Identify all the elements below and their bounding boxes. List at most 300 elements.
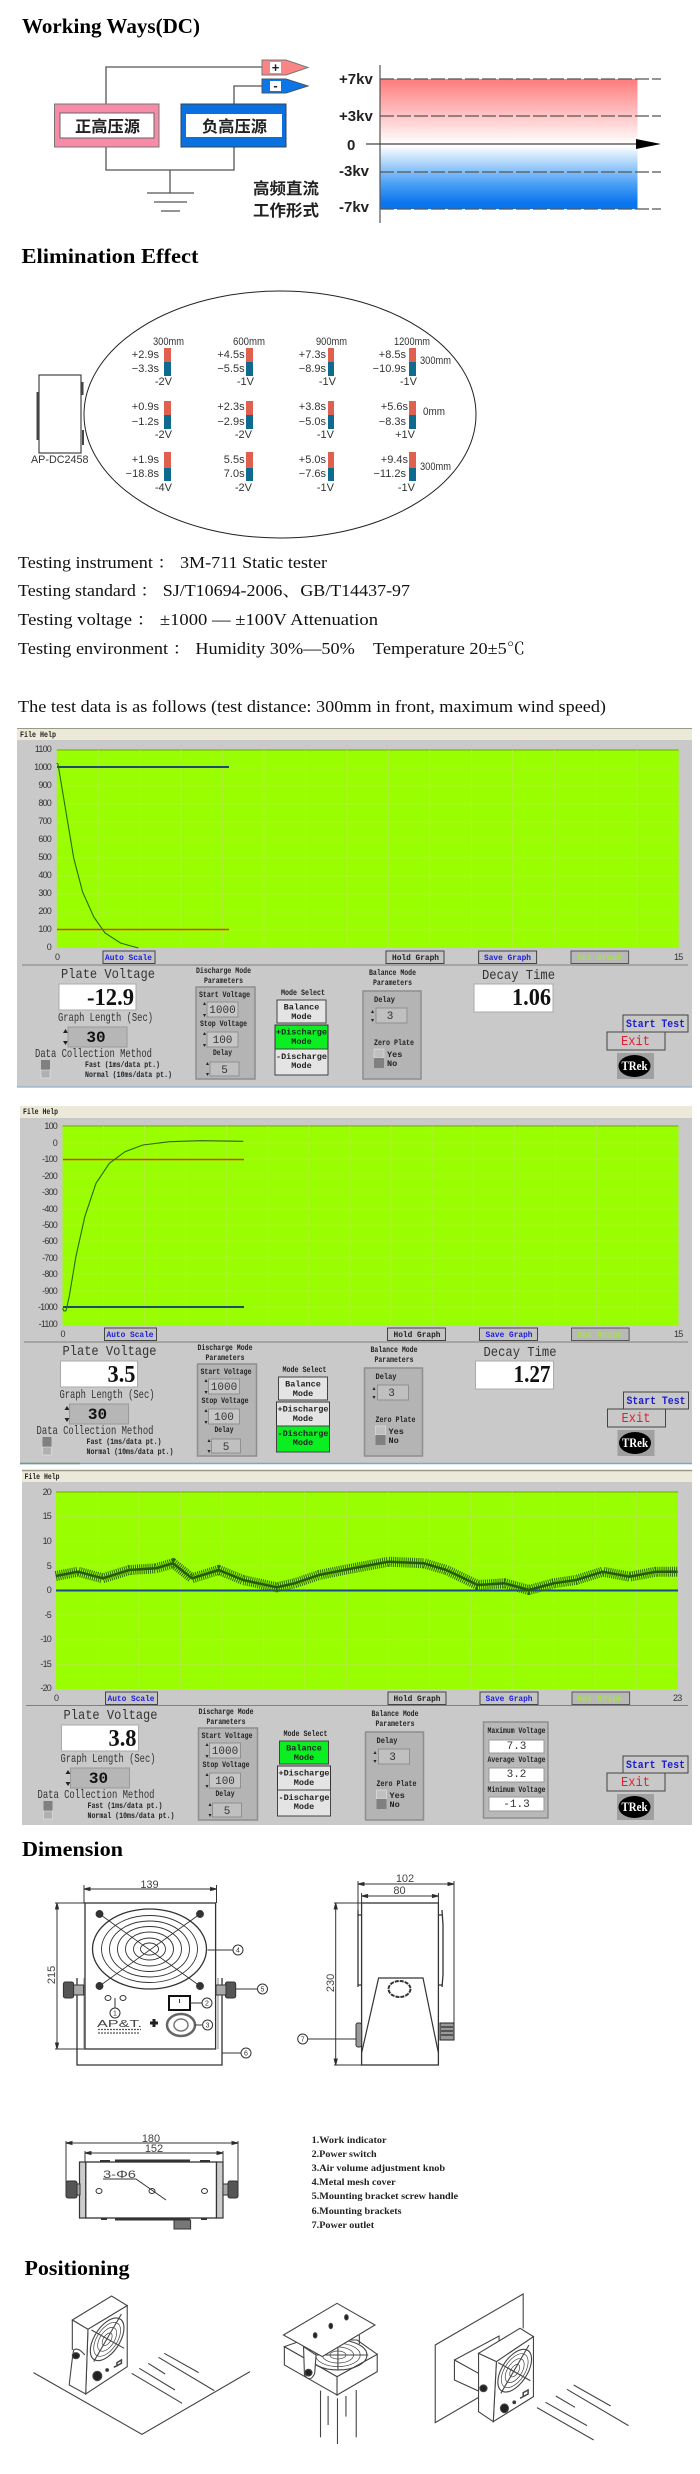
balance mode parameters [366,1709,424,1820]
negative high voltage source box: 负高压源 [202,117,267,136]
discharge mode parameters: 1000 [211,1382,237,1394]
plate voltage readout: Plate Voltage [61,967,155,983]
y axis labels: 20 [43,1487,52,1497]
controls: AP&T. [97,2019,142,2030]
row 2 values: −1.2s [132,416,159,428]
callouts: 1 [113,2010,117,2018]
heading: Elimination Effect: Elimination Effect [22,244,198,268]
controls [97,1996,195,2036]
row 2 values: -2V [235,429,253,441]
row 1 values [132,349,418,388]
y axis labels: -900 [42,1286,58,1296]
distance headers: 300mm [420,461,451,473]
row 3 values: -1V [317,482,335,494]
legend: part names: 5.Mounting bracket screw handle [312,2192,458,2202]
heading: Dimension: Dimension [22,1837,123,1861]
balance mode parameters: Delay [376,1736,398,1746]
balance mode parameters: Balance Mode [369,968,416,978]
callouts: 3 [206,2022,210,2030]
row 2 values: -2V [155,429,173,441]
balance mode parameters: Delay [374,995,395,1005]
plate voltage readout: Fast (1ms/data pt.) [88,1801,162,1811]
discharge mode parameters: 5 [224,1806,230,1818]
y axis labels: 100 [44,1121,58,1131]
graph buttons: Save Graph [486,1330,532,1340]
discharge mode parameters: Start Voltage [202,1731,252,1741]
balance mode parameters [363,968,421,1079]
plate voltage readout: -12.9 [87,985,134,1011]
y axis labels [34,744,52,952]
discharge mode parameters: Delay [216,1789,234,1799]
y axis labels: 700 [38,816,52,826]
y axis labels: 0 [53,1138,58,1148]
voltage labels [339,71,373,216]
graph buttons: Get Graph [577,953,622,963]
row 3 values: -2V [235,482,253,494]
negative output probe: - [273,78,278,93]
mode select buttons: Balance [286,1744,322,1754]
balance mode parameters: Parameters [376,1719,414,1729]
heading: Working Ways: Working Ways(DC) [22,14,200,38]
decay time readout: 1.27 [514,1362,550,1388]
dimension lines [66,2133,238,2209]
x axis labels: 15 [674,952,683,962]
y axis labels [40,1487,52,1693]
discharge mode parameters [198,1707,258,1820]
icon: desktop positioning [33,2296,250,2434]
voltage labels: -7kv [339,199,370,216]
body [80,2160,223,2220]
icon: wall positioning [435,2294,629,2440]
heading: Positioning: Positioning [24,2256,130,2280]
positive high voltage source box [54,104,159,147]
testing conditions text: Testing instrument ： 3M-711 Static tester [18,553,328,572]
mounting plates [358,1910,443,1987]
plate voltage readout: Plate Voltage [64,1708,158,1724]
mode select buttons: Mode [294,1802,314,1812]
y axis labels: 0 [47,942,52,952]
y axis labels: 200 [38,906,52,916]
plate voltage readout: Normal (10ms/data pt.) [85,1070,172,1080]
menu: File Help [23,1107,58,1117]
mode select buttons: +Discharge [278,1768,330,1778]
balance mode parameters: Yes [388,1427,404,1437]
discharge mode parameters: 1000 [209,1005,236,1017]
y axis labels: 1000 [34,762,52,772]
y axis labels: 10 [43,1536,52,1546]
plate voltage readout: Data Collection Method [38,1788,154,1802]
negative output probe [262,78,308,93]
voltage labels: +7kv [339,71,373,88]
row 3 values: +5.0s [299,454,326,466]
side knobs [63,1982,236,1998]
y axis labels [38,1121,58,1329]
y axis labels: -1000 [38,1302,58,1312]
row 1 values: +7.3s [299,349,326,361]
mounting holes [96,2169,208,2200]
start test and exit buttons with logo: Exit [621,1775,650,1791]
row 1 values: +8.5s [379,349,406,361]
distance headers: 300mm [420,355,451,367]
balance mode parameters: 3 [388,1388,395,1400]
plate voltage readout: Normal (10ms/data pt.) [86,1447,174,1457]
plate voltage readout [36,1344,174,1457]
row 2 values: +5.6s [381,401,408,413]
discharge mode parameters: Start Voltage [199,990,250,1000]
plate voltage readout: Data Collection Method [36,1424,154,1438]
y axis labels: -600 [42,1236,58,1246]
blue start voltage line [63,1306,244,1308]
plate voltage readout: 30 [88,1406,107,1424]
testing conditions text: Testing standard ： SJ/T10694-2006、GB/T14437-97 [18,581,410,600]
y axis labels: -20 [40,1683,52,1693]
row 3 values: −7.6s [299,468,326,480]
discharge mode parameters: Delay [214,1425,234,1435]
balance mode parameters: Zero Plate [376,1415,416,1425]
plate voltage readout: Graph Length (Sec) [60,1752,156,1766]
drawing: bottom view [66,2133,238,2229]
decay time readout: Decay Time [482,968,555,984]
voltage labels: +3kv [339,108,373,125]
testing conditions text: Testing voltage ： ±1000 — ±100V Attenuation [18,610,378,629]
mode select buttons: Mode Select [281,988,325,998]
row 1 values: −3.3s [132,363,159,375]
mode select buttons: Mode [291,1012,312,1022]
row 1 values: -1V [319,376,337,388]
mode select buttons: +Discharge [276,1028,327,1038]
bars [164,348,416,481]
row 1 values: -2V [155,376,173,388]
row 3 values: 7.0s [224,468,245,480]
graph buttons: Save Graph [484,953,531,963]
y axis labels: -200 [42,1171,58,1181]
mode select buttons [276,1365,330,1452]
row 3 values: -4V [155,482,173,494]
balance mode parameters: Zero Plate [374,1038,414,1048]
x axis labels: 0 [60,1329,66,1339]
callouts: 5 [261,1986,265,1994]
red stop voltage line [57,928,229,930]
mode select buttons: +Discharge [277,1404,329,1414]
row 3 values: +9.4s [381,454,408,466]
graph buttons: Auto Scale [108,1694,154,1704]
y axis labels: 300 [38,888,52,898]
discharge mode parameters: Stop Voltage [202,1396,248,1406]
icon: ceiling positioning [283,2303,377,2444]
balance mode parameters: Delay [376,1372,396,1382]
plate voltage readout: 3.8 [108,1726,136,1752]
blue start voltage line [57,766,229,768]
row 1 values: -1V [400,376,418,388]
mode select buttons: Mode [294,1778,314,1788]
panel: balance mode test [22,1470,692,1825]
panel: negative discharge test [20,1106,692,1464]
row 2 values [132,401,416,441]
plate voltage readout: Graph Length (Sec) [60,1388,154,1402]
dimension lines: 152 [145,2143,163,2155]
graph buttons: Hold Graph [394,1694,440,1704]
y axis labels: 0 [47,1585,52,1595]
row 2 values: +1V [395,429,416,441]
negative high voltage source box [181,104,286,147]
decay time readout [474,968,555,1012]
x axis labels: 23 [673,1693,682,1703]
caption: 高频直流 [253,179,319,198]
row 1 values: −8.9s [299,363,326,375]
fan grille [92,1909,206,1990]
menu: File Help [20,730,56,740]
start test and exit buttons with logo: Start Test [626,1760,685,1772]
callouts: 2 [205,2000,209,2008]
y axis labels: 1100 [35,744,52,754]
y axis labels: 5 [47,1561,52,1571]
y axis labels: -800 [42,1269,58,1279]
panel: positive discharge test [17,728,692,1087]
discharge mode parameters: Discharge Mode [198,1707,254,1717]
plate voltage readout: Plate Voltage [62,1344,156,1360]
y axis labels: -400 [42,1204,58,1214]
legend: part names: 3.Air volume adjustment knob [312,2164,445,2174]
mode select buttons: Mode [293,1389,313,1399]
voltage statistics box: Average Voltage [488,1755,546,1765]
legend: part names [312,2136,458,2231]
row 2 values: +2.3s [217,401,245,413]
bracket [362,1978,438,2053]
mode select buttons: Balance [284,1002,319,1012]
distance headers: 1200mm [394,336,430,348]
callouts: 4 [236,1948,240,1954]
decay curve [62,1141,243,1311]
start test and exit buttons with logo: Exit [621,1034,650,1050]
plate voltage readout: Normal (10ms/data pt.) [88,1811,174,1821]
mode select buttons: -Discharge [277,1429,329,1439]
row 1 values: -1V [237,376,255,388]
distance headers: 600mm [233,336,265,348]
x axis labels: 15 [674,1329,683,1339]
y axis labels: -300 [42,1187,58,1197]
discharge mode parameters: Start Voltage [200,1367,252,1377]
graph buttons [103,951,629,964]
decay time readout: Decay Time [484,1345,556,1361]
mode select buttons: Mode Select [284,1729,328,1739]
dimension lines: 139 [140,1879,159,1891]
plate voltage readout: 30 [86,1029,106,1047]
plate voltage readout: Fast (1ms/data pt.) [86,1437,162,1447]
balance mode parameters: No [390,1800,400,1810]
start test and exit buttons with logo: Start Test [626,1396,686,1408]
discharge mode parameters: Delay [213,1048,232,1058]
discharge mode parameters: 100 [214,1412,234,1424]
y axis labels: 500 [38,852,52,862]
mode select buttons: Mode [291,1061,312,1071]
voltage statistics box: -1.3 [503,1799,530,1811]
dimension lines [46,1879,216,2049]
y axis labels: 100 [38,924,52,934]
discharge mode parameters [196,966,255,1079]
plate voltage readout: Data Collection Method [35,1047,152,1061]
caption: 工作形式 [253,202,319,220]
wiring [106,67,262,211]
row 2 values: -1V [317,429,335,441]
discharge mode parameters: Parameters [206,1717,246,1727]
plate voltage readout [35,967,172,1080]
legend: part names: 1.Work indicator [312,2136,387,2146]
balance mode parameters: Balance Mode [372,1709,418,1719]
dimension lines: 102 [396,1873,414,1885]
row 3 values: -1V [398,482,416,494]
discharge mode parameters: 5 [223,1442,229,1454]
distance headers [153,336,451,473]
x axis labels [60,1329,683,1339]
dimension lines [325,1873,454,2065]
caption [253,179,319,220]
mode select buttons: Mode [293,1414,313,1424]
plate voltage readout: Graph Length (Sec) [58,1011,153,1025]
y axis labels: 900 [38,780,52,790]
balance mode parameters [364,1345,422,1456]
voltage labels: -3kv [339,163,370,180]
balance mode parameters: No [388,1436,399,1446]
start test and exit buttons with logo: TRek [622,1799,648,1814]
positive band [380,79,638,144]
graph buttons [106,1692,630,1704]
positive high voltage source box: 正高压源 [75,117,140,136]
voltage statistics box [484,1722,548,1818]
y axis labels: -15 [40,1659,52,1669]
row 2 values: −8.3s [379,416,406,428]
y axis labels: -5 [45,1610,52,1620]
x axis labels: 0 [55,952,60,962]
legend: part names: 2.Power switch [312,2150,377,2160]
distance headers: 0mm [423,406,445,418]
time axis arrow [366,139,661,149]
callout 7: 7 [301,2036,305,2044]
balance mode parameters: Balance Mode [370,1345,418,1355]
x axis labels [54,1693,682,1703]
mode select buttons: -Discharge [276,1052,327,1062]
positive output probe: + [272,60,280,75]
y axis labels: -1100 [39,1319,58,1329]
graph buttons: Get Graph [578,1330,622,1340]
dimension lines: 230 [325,1974,337,1992]
discharge mode parameters: Parameters [206,1353,244,1363]
x axis labels [55,952,683,962]
balance mode parameters: Yes [390,1791,405,1801]
discharge mode parameters: Stop Voltage [200,1019,247,1029]
negative band [380,146,638,209]
noisy voltage trace [56,1562,678,1590]
balance mode parameters: 3 [387,1011,393,1023]
mode select buttons: Mode [293,1438,313,1448]
graph buttons: Auto Scale [105,953,152,963]
y axis labels: -100 [42,1154,58,1164]
row 3 values: −11.2s [373,468,406,480]
coverage ellipse [84,291,476,538]
row 3 values: +1.9s [132,454,159,466]
discharge mode parameters: 1000 [212,1746,238,1758]
voltage statistics box: Minimum Voltage [488,1785,546,1795]
bracket and body [77,1903,222,2065]
y axis labels: 600 [38,834,52,844]
start test and exit buttons with logo: Start Test [626,1019,685,1031]
plate voltage readout: 30 [89,1770,108,1788]
red stop voltage line [63,1158,244,1160]
graph buttons: Hold Graph [394,1330,440,1340]
knobs [66,2181,238,2229]
plot [40,1487,682,1703]
balance mode parameters: Yes [387,1050,402,1060]
dimension lines: 215 [46,1966,58,1984]
balance mode parameters: No [387,1059,397,1069]
legend: part names: 6.Mounting brackets [312,2207,402,2217]
discharge mode parameters: Discharge Mode [196,966,251,976]
start test and exit buttons with logo: TRek [622,1058,648,1073]
row 1 values: −5.5s [217,363,245,375]
y axis labels: -10 [40,1634,52,1644]
y axis labels: 15 [43,1511,52,1521]
row 2 values: +3.8s [299,401,326,413]
plate voltage readout: Fast (1ms/data pt.) [85,1060,160,1070]
mode select buttons: -Discharge [278,1793,330,1803]
testing conditions text: Testing environment ： Humidity 30%—50% Temperature 20±5℃ [18,639,525,658]
row 3 values [126,454,416,494]
body [362,1903,438,2065]
start test and exit buttons with logo: TRek [622,1435,649,1450]
discharge mode parameters: Parameters [204,976,243,986]
plot [34,744,683,962]
device AP-DC2458 [31,375,88,466]
dimension lines: 110 [142,2197,160,2209]
mode select buttons [278,1729,330,1816]
row 1 values: −10.9s [373,363,406,375]
decay time readout: 1.06 [512,985,551,1011]
dimension lines: 180 [142,2133,160,2145]
callout 7 [298,2034,356,2044]
voltage statistics box: 7.3 [507,1741,526,1753]
x axis labels: 0 [54,1693,59,1703]
graph buttons: Hold Graph [392,953,439,963]
row 2 values: −2.9s [217,416,245,428]
mode select buttons: Mode [294,1753,314,1763]
row 2 values: +0.9s [132,401,159,413]
decay curve [57,763,138,948]
discharge mode parameters [198,1343,256,1456]
waveform chart [339,65,661,223]
circuit diagram [54,60,319,220]
balance mode parameters: Parameters [373,978,412,988]
callouts [110,1945,268,2058]
start test and exit buttons with logo [607,1015,688,1079]
discharge mode parameters: Stop Voltage [202,1760,250,1770]
distance headers: 900mm [316,336,347,348]
balance mode parameters: Parameters [374,1355,414,1365]
row 1 values: +4.5s [217,349,245,361]
mode select buttons [275,988,328,1075]
legend: part names: 4.Metal mesh cover [312,2178,396,2188]
mode select buttons: Mode Select [282,1365,326,1375]
graph buttons [104,1328,629,1340]
discharge mode parameters: 100 [215,1776,235,1788]
row 1 values: +2.9s [132,349,159,361]
testing conditions text [18,553,525,658]
mode select buttons: Mode [291,1037,312,1047]
drawing: front view [46,1879,268,2065]
graph buttons: Auto Scale [106,1330,154,1340]
start test and exit buttons with logo: Exit [622,1411,650,1427]
start test and exit buttons with logo [608,1392,688,1456]
row 2 values: −5.0s [299,416,326,428]
discharge mode parameters: Discharge Mode [198,1343,252,1353]
